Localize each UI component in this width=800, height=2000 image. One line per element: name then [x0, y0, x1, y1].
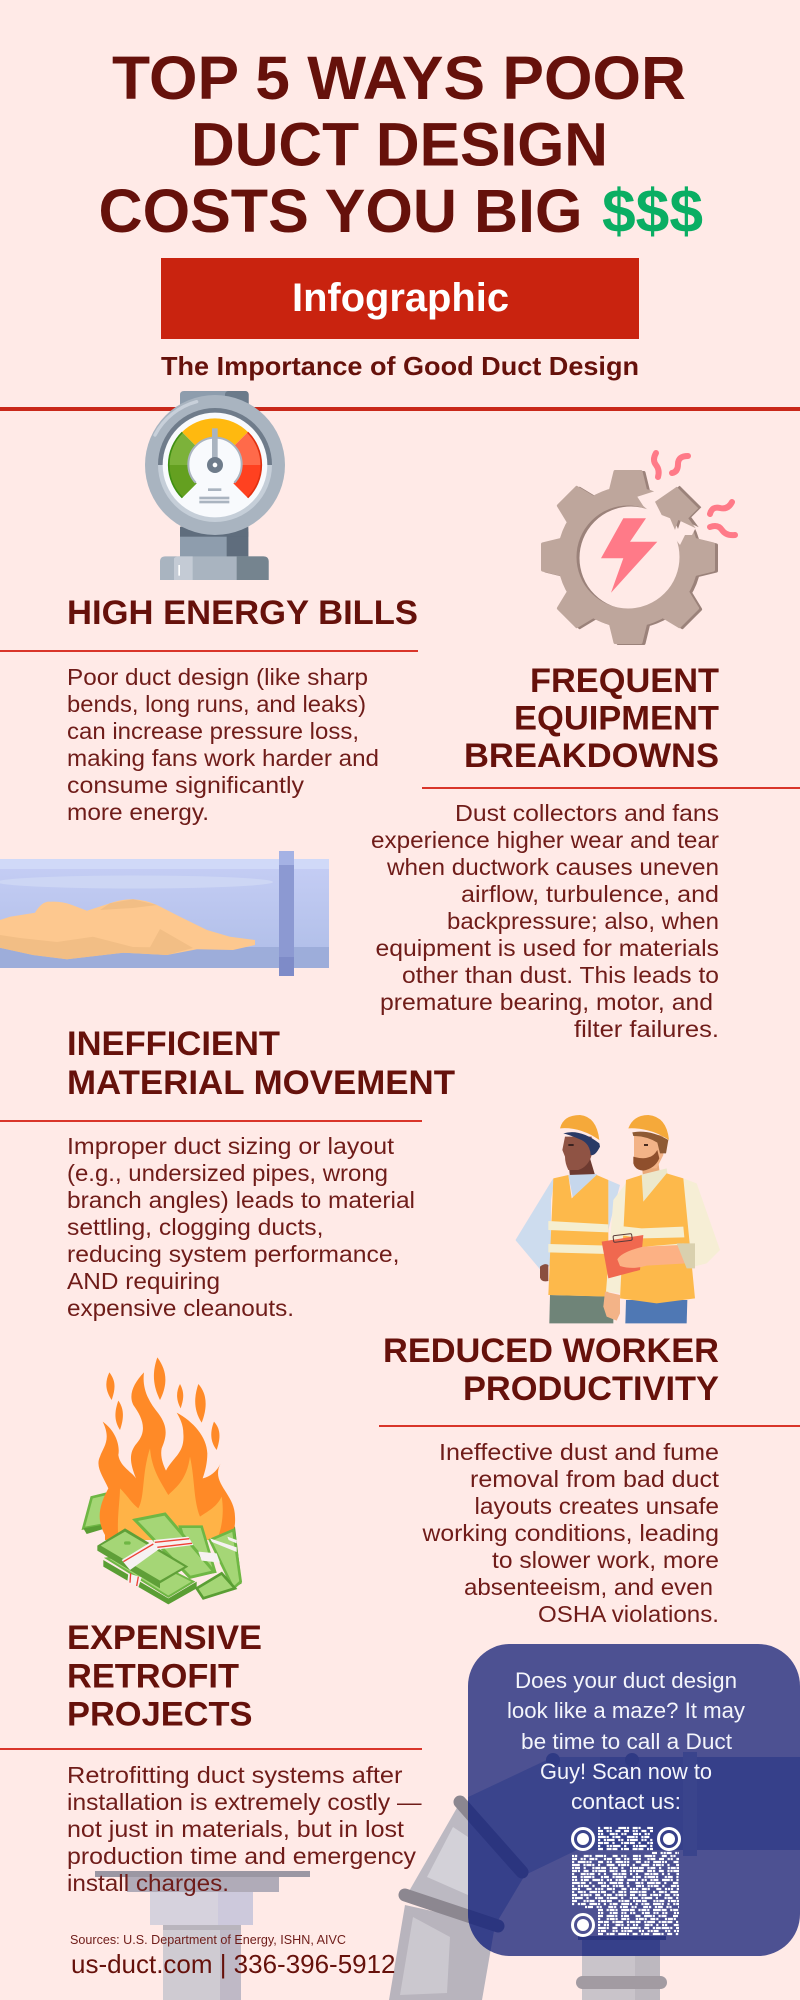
text: expensive retrofit projects: Retrofitting duct systems after — [67, 1762, 403, 1788]
icon: two workers in hard hats — [517, 1115, 720, 1323]
heading: expensive retrofit projects: RETROFIT — [67, 1658, 239, 1696]
icon: burning money — [83, 1357, 242, 1604]
text: expensive retrofit projects: production time and emergency — [67, 1843, 417, 1869]
title: $$$ — [602, 177, 703, 245]
text: inefficient material movement: Improper duct sizing or layout — [67, 1133, 395, 1159]
QR code — [572, 1828, 680, 1936]
text: frequent equipment breakdowns: premature bearing, motor, and — [380, 989, 713, 1015]
text: high energy bills: consume significantly — [67, 772, 305, 798]
text: high energy bills — [67, 664, 379, 825]
panel: expensive retrofit projects — [0, 1357, 422, 1896]
text: frequent equipment breakdowns — [371, 800, 719, 1042]
title — [98, 44, 703, 245]
text: inefficient material movement — [67, 1133, 415, 1321]
heading: inefficient material movement — [67, 1025, 455, 1102]
heading: frequent equipment breakdowns — [464, 662, 719, 775]
heading: expensive retrofit projects — [67, 1619, 262, 1734]
text: reduced worker productivity: OSHA violations. — [538, 1601, 719, 1627]
text: frequent equipment breakdowns: filter failures. — [574, 1016, 719, 1042]
text: frequent equipment breakdowns: other than dust. This leads to — [402, 962, 719, 988]
heading: reduced worker productivity — [383, 1332, 719, 1408]
heading: frequent equipment breakdowns: BREAKDOWNS — [464, 737, 719, 775]
text: reduced worker productivity: working conditions, leading — [421, 1520, 719, 1546]
subtitle: The Importance of Good Duct Design — [161, 351, 639, 381]
text: high energy bills: making fans work harder and — [67, 745, 379, 771]
text: inefficient material movement: settling, clogging ducts, — [67, 1214, 324, 1240]
panel: call to action — [468, 1644, 800, 1956]
text: reduced worker productivity: absenteeism, and even — [464, 1574, 713, 1600]
call to action text: contact us: — [571, 1789, 681, 1814]
text: high energy bills: can increase pressure loss, — [67, 718, 359, 744]
heading: inefficient material movement: MATERIAL MOVEMENT — [67, 1064, 455, 1102]
background illustration: duct pipes — [95, 1799, 667, 2000]
text: inefficient material movement: expensive cleanouts. — [67, 1295, 294, 1321]
contact line: us-duct.com | 336-396-5912 — [71, 1949, 396, 1979]
text: inefficient material movement: reducing system performance, — [67, 1241, 400, 1267]
panel: reduced worker productivity — [379, 1115, 800, 1627]
banner: Infographic — [161, 258, 639, 339]
title: COSTS YOU BIG — [98, 177, 582, 245]
call to action text: be time to call a Duct — [521, 1729, 732, 1754]
text: frequent equipment breakdowns: when ductwork causes uneven — [386, 854, 719, 880]
call to action text: Guy! Scan now to — [540, 1759, 712, 1784]
text: reduced worker productivity: to slower work, more — [492, 1547, 719, 1573]
panel: inefficient material movement — [0, 851, 455, 1321]
text: expensive retrofit projects: installation is extremely costly — — [67, 1789, 422, 1815]
heading: high energy bills: HIGH ENERGY BILLS — [67, 594, 418, 632]
panel: frequent equipment breakdowns — [371, 453, 800, 1042]
icon: pressure gauge — [145, 391, 285, 580]
text: reduced worker productivity — [421, 1439, 720, 1627]
text: frequent equipment breakdowns: experience higher wear and tear — [371, 827, 719, 853]
call to action text: Does your duct design — [515, 1668, 737, 1693]
call to action text: look like a maze? It may — [507, 1698, 745, 1723]
text: reduced worker productivity: layouts creates unsafe — [474, 1493, 719, 1519]
text: inefficient material movement: branch angles) leads to material — [67, 1187, 415, 1213]
text: high energy bills: Poor duct design (like sharp — [67, 664, 368, 690]
text: frequent equipment breakdowns: Dust collectors and fans — [455, 800, 719, 826]
title: TOP 5 WAYS POOR — [112, 44, 686, 112]
text: frequent equipment breakdowns: airflow, turbulence, and — [461, 881, 719, 907]
heading: reduced worker productivity: REDUCED WORKER — [383, 1332, 719, 1370]
icon: broken gear — [542, 453, 735, 644]
text: frequent equipment breakdowns: equipment is used for materials — [376, 935, 719, 961]
text: reduced worker productivity: removal from bad duct — [470, 1466, 720, 1492]
text: expensive retrofit projects: not just in materials, but in lost — [67, 1816, 405, 1842]
text: high energy bills: more energy. — [67, 799, 209, 825]
heading: frequent equipment breakdowns: FREQUENT — [530, 662, 719, 700]
text: reduced worker productivity: Ineffective dust and fume — [439, 1439, 719, 1465]
text: inefficient material movement: (e.g., undersized pipes, wrong — [67, 1160, 388, 1186]
call to action text — [507, 1668, 745, 1814]
heading: inefficient material movement: INEFFICIENT — [67, 1025, 280, 1063]
sources note: Sources: U.S. Department of Energy, ISHN, AIVC — [70, 1933, 346, 1947]
heading: expensive retrofit projects: EXPENSIVE — [67, 1619, 262, 1657]
text: expensive retrofit projects — [67, 1762, 422, 1896]
panel: high energy bills — [0, 391, 418, 825]
text: frequent equipment breakdowns: backpressure; also, when — [447, 908, 719, 934]
heading: frequent equipment breakdowns: EQUIPMENT — [514, 700, 719, 738]
heading: reduced worker productivity: PRODUCTIVITY — [463, 1370, 719, 1408]
text: high energy bills: bends, long runs, and leaks) — [67, 691, 366, 717]
heading: expensive retrofit projects: PROJECTS — [67, 1696, 252, 1734]
banner: Infographic: Infographic — [292, 276, 509, 320]
icon: duct with settled material — [0, 851, 329, 976]
text: inefficient material movement: AND requiring — [67, 1268, 220, 1294]
title: DUCT DESIGN — [191, 110, 608, 178]
text: expensive retrofit projects: install charges. — [67, 1870, 229, 1896]
